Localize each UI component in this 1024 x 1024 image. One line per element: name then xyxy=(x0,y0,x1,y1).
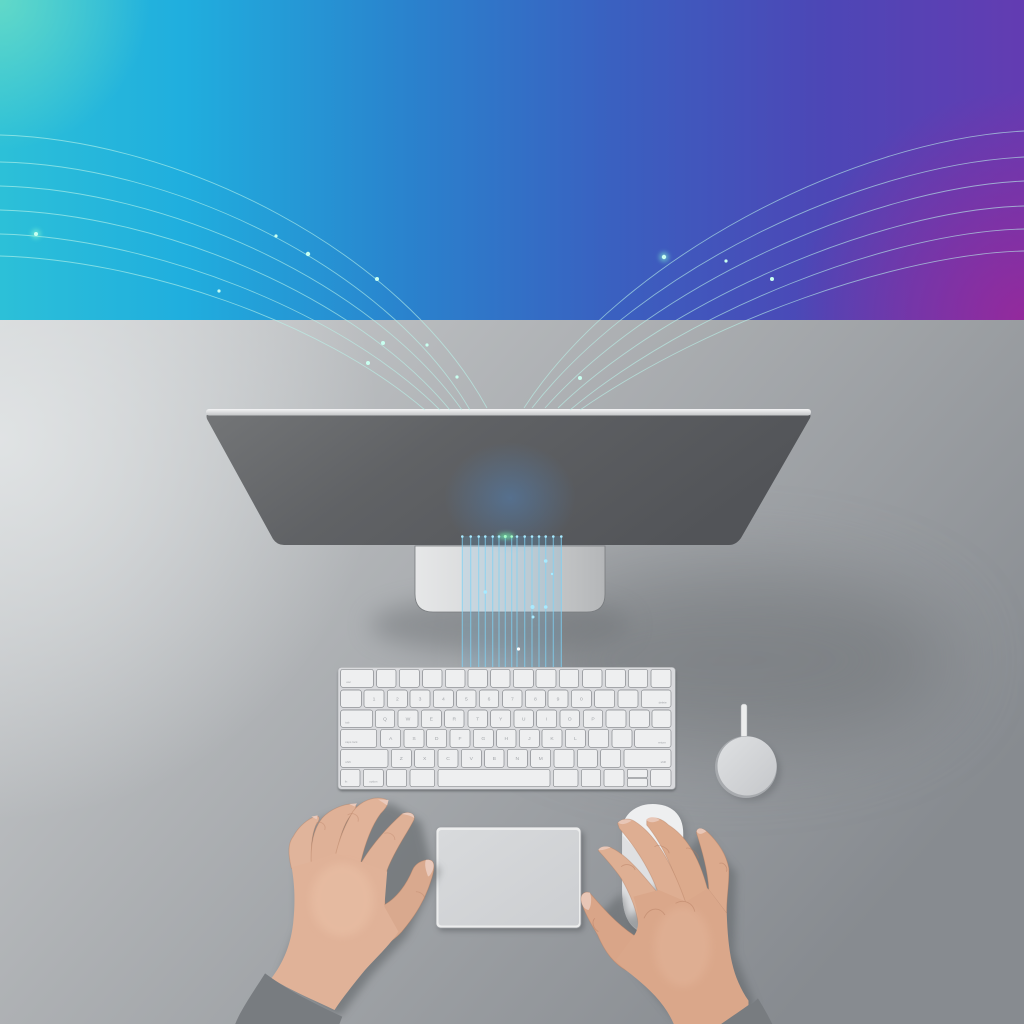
left hand with sleeve xyxy=(235,798,440,1024)
key row 1: esc xyxy=(346,680,351,684)
key row 4 xyxy=(341,729,671,747)
key row 6 xyxy=(341,769,671,787)
charger puck xyxy=(718,736,776,796)
key row 2: 2 xyxy=(396,696,399,702)
key row 3: E xyxy=(430,717,434,723)
left hand knuckle marks xyxy=(316,814,424,900)
key row 2: 6 xyxy=(488,696,491,702)
key row 2: 8 xyxy=(534,696,537,702)
right thumb xyxy=(581,892,644,971)
key row 3: Y xyxy=(499,717,503,723)
right middle finger xyxy=(618,819,686,903)
charger cable xyxy=(741,704,747,738)
key row 5: shift xyxy=(345,760,351,764)
key row 2: 1 xyxy=(373,696,376,702)
key row 4: H xyxy=(505,736,509,742)
key row 5: V xyxy=(470,756,474,762)
key row 5: C xyxy=(446,756,450,762)
key row 3: P xyxy=(591,717,595,723)
key row 2: 4 xyxy=(442,696,445,702)
trackpad xyxy=(436,827,584,931)
monitor xyxy=(206,409,811,612)
wireless charger xyxy=(715,704,781,801)
key row 4: K xyxy=(550,736,554,742)
key row 4: A xyxy=(389,736,393,742)
key row 3: R xyxy=(453,717,457,723)
key row 3 xyxy=(341,710,671,727)
monitor screen back xyxy=(206,415,810,545)
right pinky xyxy=(697,829,729,913)
key row 3: I xyxy=(546,717,547,723)
right hand with sleeve xyxy=(581,817,772,1024)
data stream: vertical light lines xyxy=(461,533,563,670)
right sleeve xyxy=(721,998,772,1024)
key row 4: return xyxy=(658,740,666,744)
left middle finger xyxy=(333,798,388,865)
key row 4: S xyxy=(412,736,416,742)
panel: gradient sky band xyxy=(0,0,1024,320)
key row 3: T xyxy=(476,717,479,723)
left hand nails xyxy=(311,799,434,876)
right hand nails xyxy=(581,817,706,910)
right palm xyxy=(616,888,748,1024)
key row 2: 0 xyxy=(580,696,583,702)
key row 3: tab xyxy=(345,721,350,725)
key row 3: O xyxy=(568,717,572,723)
right hand knuckle marks xyxy=(593,846,727,932)
key row 4: J xyxy=(528,736,531,742)
key row 4: L xyxy=(574,736,577,742)
monitor stand xyxy=(415,546,605,612)
monitor top edge xyxy=(206,409,811,416)
key row 6: fn xyxy=(345,780,348,784)
key row 5: Z xyxy=(400,756,403,762)
key row 5: shift xyxy=(661,760,666,764)
left sleeve xyxy=(235,973,342,1024)
glowing nodes: left xyxy=(31,229,459,379)
key row 2: delete xyxy=(659,700,667,704)
right index finger xyxy=(598,847,663,930)
key row 5: N xyxy=(516,756,520,762)
magic mouse xyxy=(622,804,687,933)
left thumb xyxy=(370,860,434,950)
key row 4: D xyxy=(435,736,439,742)
key row 2: 3 xyxy=(419,696,422,702)
key row 3: U xyxy=(522,717,526,723)
key row 5: M xyxy=(539,756,543,762)
key row 5: B xyxy=(493,756,497,762)
left ring finger xyxy=(311,804,356,867)
key row 3: Q xyxy=(383,717,387,723)
key row 5: X xyxy=(423,756,427,762)
key row 1 xyxy=(341,669,671,687)
left index finger xyxy=(360,813,414,905)
panel: grey desk surface xyxy=(0,320,1024,1024)
key row 3: W xyxy=(406,717,411,723)
key row 2 xyxy=(341,690,671,707)
key row 5 xyxy=(341,749,671,767)
key row 4: G xyxy=(481,736,485,742)
right ring finger xyxy=(647,818,708,910)
keyboard xyxy=(338,667,676,791)
data stream arcs: right xyxy=(524,131,1024,410)
key row 2: 9 xyxy=(557,696,560,702)
key row 2: 7 xyxy=(511,696,514,702)
left palm xyxy=(271,853,398,1010)
data stream arcs: left xyxy=(0,135,487,410)
glowing nodes: right xyxy=(578,252,774,380)
key row 2: 5 xyxy=(465,696,468,702)
key row 4: F xyxy=(458,736,462,742)
key row 4: caps lock xyxy=(345,740,358,744)
left pinky xyxy=(289,816,319,868)
key row 6: option xyxy=(369,780,378,784)
blue glow on screen xyxy=(444,442,576,554)
